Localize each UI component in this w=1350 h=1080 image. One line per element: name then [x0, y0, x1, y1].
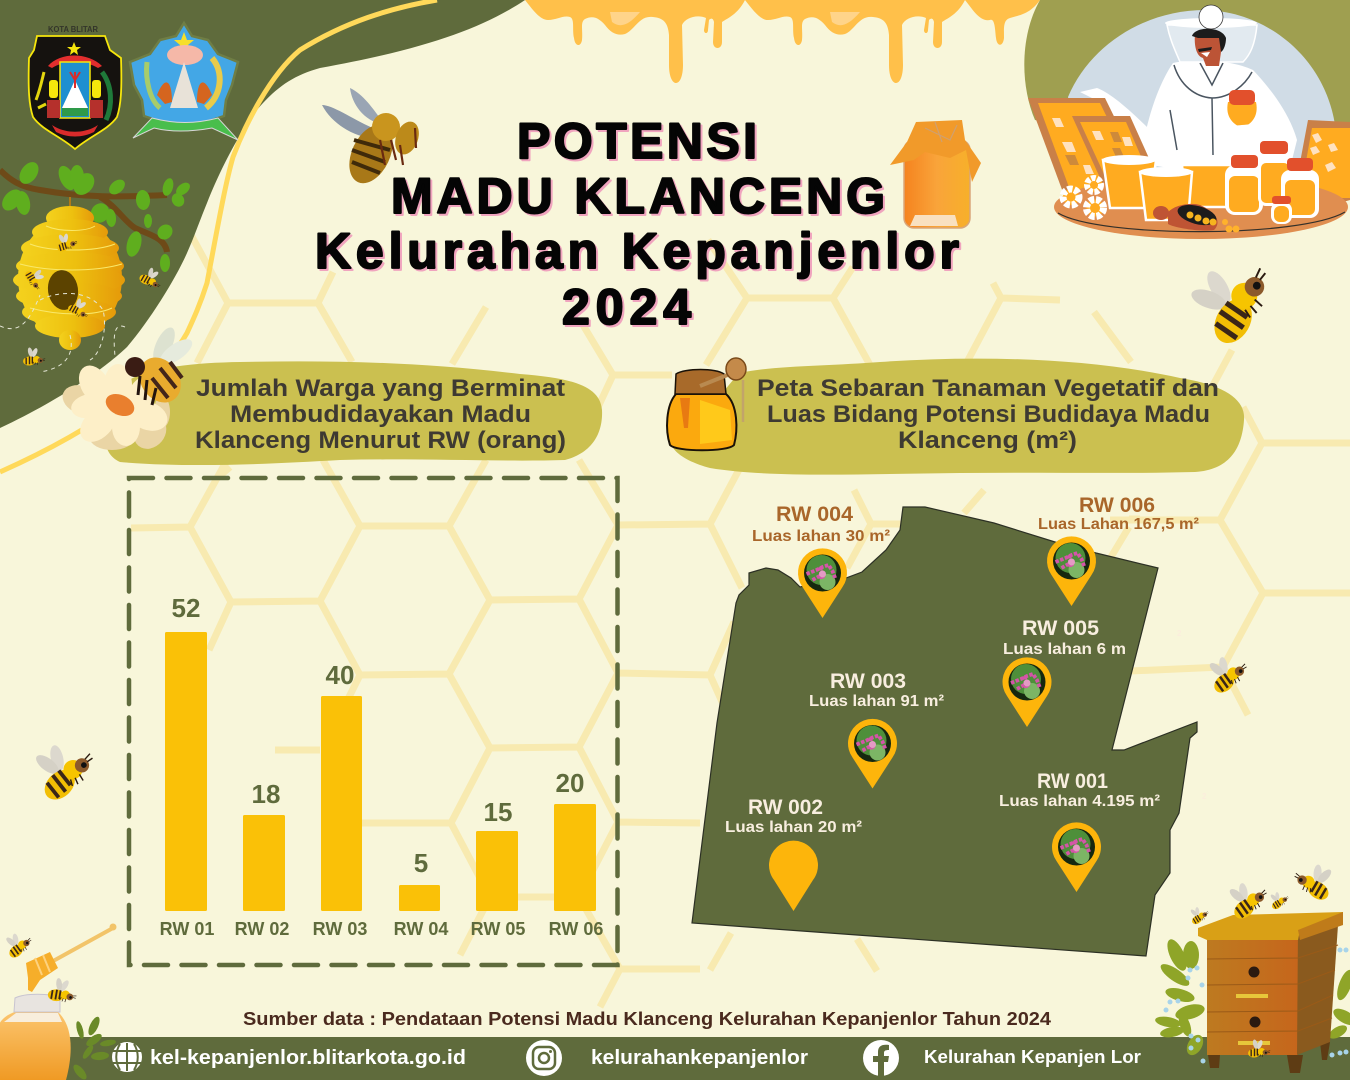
faint stray superscripts: 2 — [1202, 792, 1207, 801]
source note: Sumber data : Pendataan Potensi Madu Klanceng Kelurahan Kepanjenlor Tahun 2024 — [243, 1009, 1051, 1029]
veil and hat — [1167, 25, 1257, 62]
map label: RW 001: Luas lahan 4.195 m² — [999, 793, 1160, 810]
category labels: RW 03 — [313, 919, 367, 939]
green corner shape — [0, 0, 525, 428]
map pin: RW 001 — [1052, 822, 1101, 892]
leaves — [0, 159, 192, 272]
face — [1195, 31, 1222, 66]
map label: RW 004: Luas lahan 30 m² — [752, 528, 890, 545]
map label: RW 006 — [1038, 494, 1199, 533]
footer: instagram — [526, 1040, 808, 1076]
map pin: RW 004 — [798, 548, 847, 618]
heading text: Klanceng (m²) — [898, 427, 1077, 454]
logo: Kota Blitar shield — [29, 25, 121, 149]
illustration: beekeeper with honey stall — [1028, 5, 1350, 239]
leaves — [71, 1015, 116, 1080]
map label: RW 005: Luas lahan 6 m — [1003, 641, 1126, 658]
entrances — [1248, 966, 1260, 978]
banner: right heading — [672, 359, 1244, 475]
icon: instagram — [526, 1040, 562, 1076]
faint stray superscripts: 2 — [1177, 629, 1182, 638]
bars — [165, 632, 596, 911]
map label: RW 005 — [1003, 617, 1126, 658]
map label: RW 004: RW 004 — [776, 503, 853, 526]
small bees — [53, 231, 79, 257]
icon: honey jar with cloth — [890, 120, 981, 228]
values: 5 — [414, 848, 428, 878]
title: MADU KLANCENG — [391, 168, 885, 224]
category labels: RW 05 — [471, 919, 525, 939]
daisies — [1063, 189, 1079, 205]
map label: RW 002 — [725, 796, 862, 836]
values: 18 — [252, 779, 280, 809]
map label: RW 006: RW 006 — [1079, 494, 1155, 517]
legs — [1208, 1042, 1330, 1073]
map label: RW 002: Luas lahan 20 m² — [725, 819, 862, 836]
heading text: Membudidayakan Madu — [230, 401, 531, 428]
category labels: RW 01 — [160, 919, 214, 939]
icon: facebook — [863, 1040, 899, 1076]
faint stray superscripts — [1177, 629, 1207, 801]
map pin: RW 005 — [1002, 657, 1052, 727]
map label: RW 001: RW 001 — [1037, 770, 1108, 793]
illustration: branch with beehive — [0, 159, 192, 374]
title: Kelurahan Kepanjenlor — [315, 223, 959, 279]
heading text: Luas Bidang Potensi Budidaya Madu — [767, 401, 1210, 428]
jar — [0, 1012, 71, 1080]
heading text: Klanceng Menurut RW (orang) — [195, 427, 566, 454]
category labels: RW 02 — [235, 919, 289, 939]
tray — [1054, 175, 1348, 239]
beekeeper suit — [1140, 60, 1297, 170]
footer band — [0, 1037, 1350, 1080]
title: POTENSI — [517, 113, 757, 169]
footer: website — [113, 1043, 466, 1071]
scoop — [1153, 206, 1169, 220]
illustration: wooden beehive box — [1154, 864, 1350, 1073]
bee on flower — [125, 324, 196, 411]
map label: RW 003: RW 003 — [830, 670, 906, 693]
map pin: RW 003 — [848, 719, 897, 788]
icon: bee left — [31, 740, 98, 808]
values: 52 — [172, 593, 200, 623]
map label: RW 006: Luas Lahan 167,5 m² — [1038, 516, 1199, 533]
category labels: RW 04 — [394, 919, 448, 939]
backdrop circle — [1068, 10, 1335, 200]
foliage — [1154, 937, 1350, 1058]
logo: kelurahan emblem — [130, 23, 238, 140]
map pin: RW 006 — [1047, 536, 1096, 606]
yellow curve — [0, 0, 437, 472]
footer: facebook — [863, 1040, 1141, 1076]
map — [692, 507, 1197, 956]
logo: Kota Blitar shield: KOTA BLITAR — [48, 25, 98, 34]
honey drips — [525, 0, 1040, 83]
icon: globe — [113, 1043, 141, 1071]
icon: honey jar with dipper — [667, 358, 746, 450]
bees — [1227, 881, 1269, 923]
category labels — [160, 919, 603, 939]
footer: website: kel-kepanjenlor.blitarkota.go.id — [150, 1047, 466, 1069]
category labels: RW 06 — [549, 919, 603, 939]
title: 2024 — [562, 279, 691, 335]
heading text — [195, 375, 566, 454]
heading text: Peta Sebaran Tanaman Vegetatif dan — [757, 375, 1219, 402]
banner: left heading — [105, 361, 602, 465]
heading text — [757, 375, 1219, 454]
icon: small bee right — [1207, 655, 1249, 697]
footer: instagram: kelurahankepanjenlor — [591, 1047, 808, 1069]
icon: bee top right — [1181, 250, 1289, 359]
map label: RW 003: Luas lahan 91 m² — [809, 693, 944, 710]
icon: flower with bee — [58, 324, 196, 455]
map label: RW 003 — [809, 670, 944, 710]
map label: RW 005: RW 005 — [1022, 617, 1099, 640]
top right green shape — [1024, 0, 1350, 182]
roof — [1198, 912, 1343, 940]
right frame — [1293, 120, 1350, 205]
chart frame — [129, 478, 618, 965]
map label: RW 002: RW 002 — [748, 796, 823, 819]
values: 20 — [556, 768, 584, 798]
map label: RW 001 — [999, 770, 1160, 810]
map label: RW 004 — [752, 503, 890, 545]
values: 40 — [326, 660, 354, 690]
map pin: RW 002 — [769, 841, 818, 911]
left frames — [1028, 98, 1155, 200]
dipper — [55, 928, 113, 960]
title — [315, 113, 959, 335]
illustration: honey jar and dipper — [0, 924, 116, 1080]
front and side — [1207, 940, 1298, 1055]
buckets — [1103, 160, 1156, 208]
bar chart — [160, 593, 603, 939]
jars — [1225, 165, 1263, 215]
values — [172, 593, 584, 878]
held jar — [1227, 102, 1257, 128]
heading text: Jumlah Warga yang Berminat — [196, 375, 565, 402]
values: 15 — [484, 797, 512, 827]
icon: bee near title — [322, 88, 423, 190]
footer: facebook: Kelurahan Kepanjen Lor — [924, 1047, 1141, 1067]
hive — [13, 206, 125, 350]
